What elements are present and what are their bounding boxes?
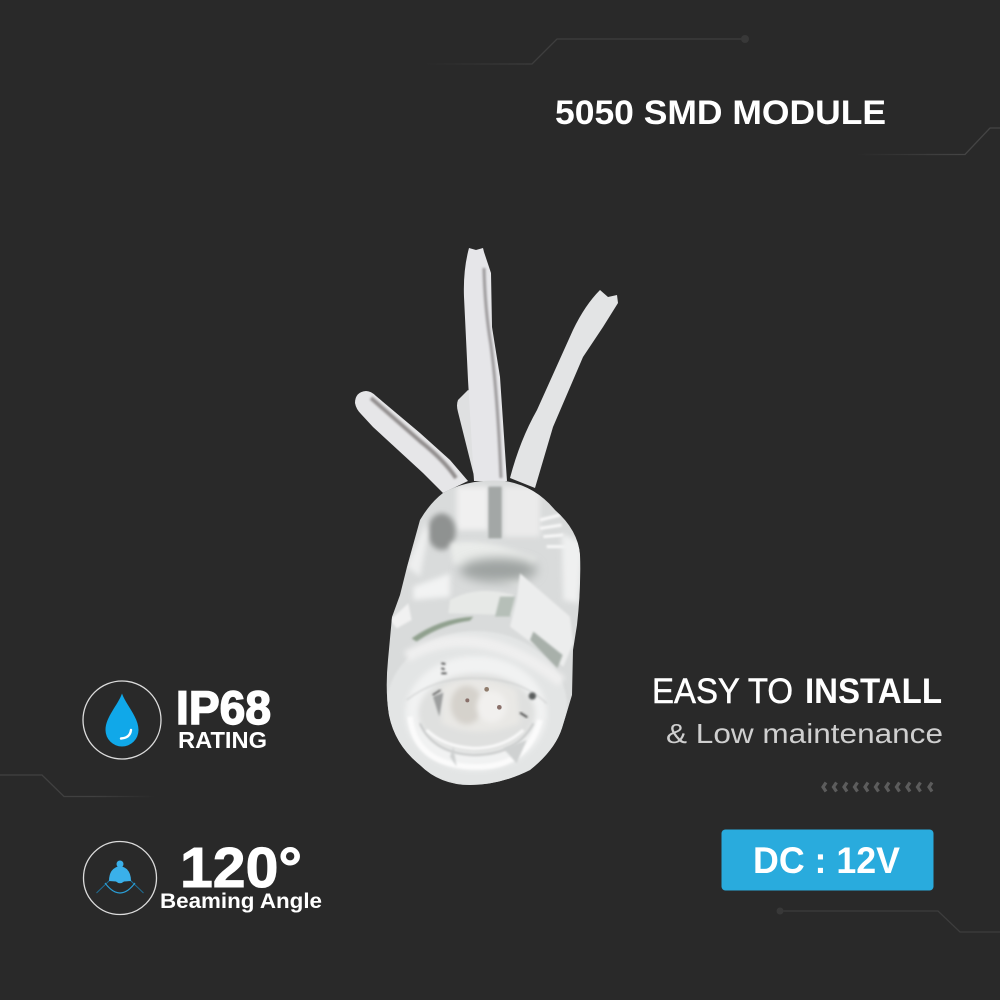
upper body texture <box>390 487 583 668</box>
decorative circuit line: left <box>0 775 155 796</box>
wire: left <box>355 391 468 493</box>
product photo: LED module <box>355 248 618 786</box>
icon: beam angle <box>84 842 156 914</box>
120 degree label: 120° <box>180 836 302 900</box>
chevron row <box>823 782 932 792</box>
feature: easy to install <box>652 672 943 749</box>
subheading: & Low maintenance <box>666 718 943 749</box>
decorative circuit line: top <box>424 35 749 64</box>
wire: centre <box>464 248 507 481</box>
IP68 label: IP68 <box>176 681 271 734</box>
feature: beam angle <box>84 836 322 914</box>
lens <box>386 631 567 786</box>
beaming angle label: Beaming Angle <box>160 889 322 913</box>
icon: water drop <box>83 681 161 759</box>
heading part: install: INSTALL <box>805 672 942 711</box>
feature: IP68 rating <box>83 681 271 759</box>
decorative circuit line: bottom right <box>776 908 1000 932</box>
wire: right <box>510 290 618 488</box>
voltage text: DC : 12V <box>753 840 900 881</box>
heading part: easy to: EASY TO <box>652 672 793 711</box>
voltage badge <box>722 830 934 890</box>
module body <box>386 480 583 786</box>
rating label: RATING <box>178 727 267 753</box>
wire: back stub <box>457 390 480 480</box>
title: 5050 SMD MODULE <box>555 94 886 132</box>
decorative circuit line: top right <box>856 128 1000 154</box>
